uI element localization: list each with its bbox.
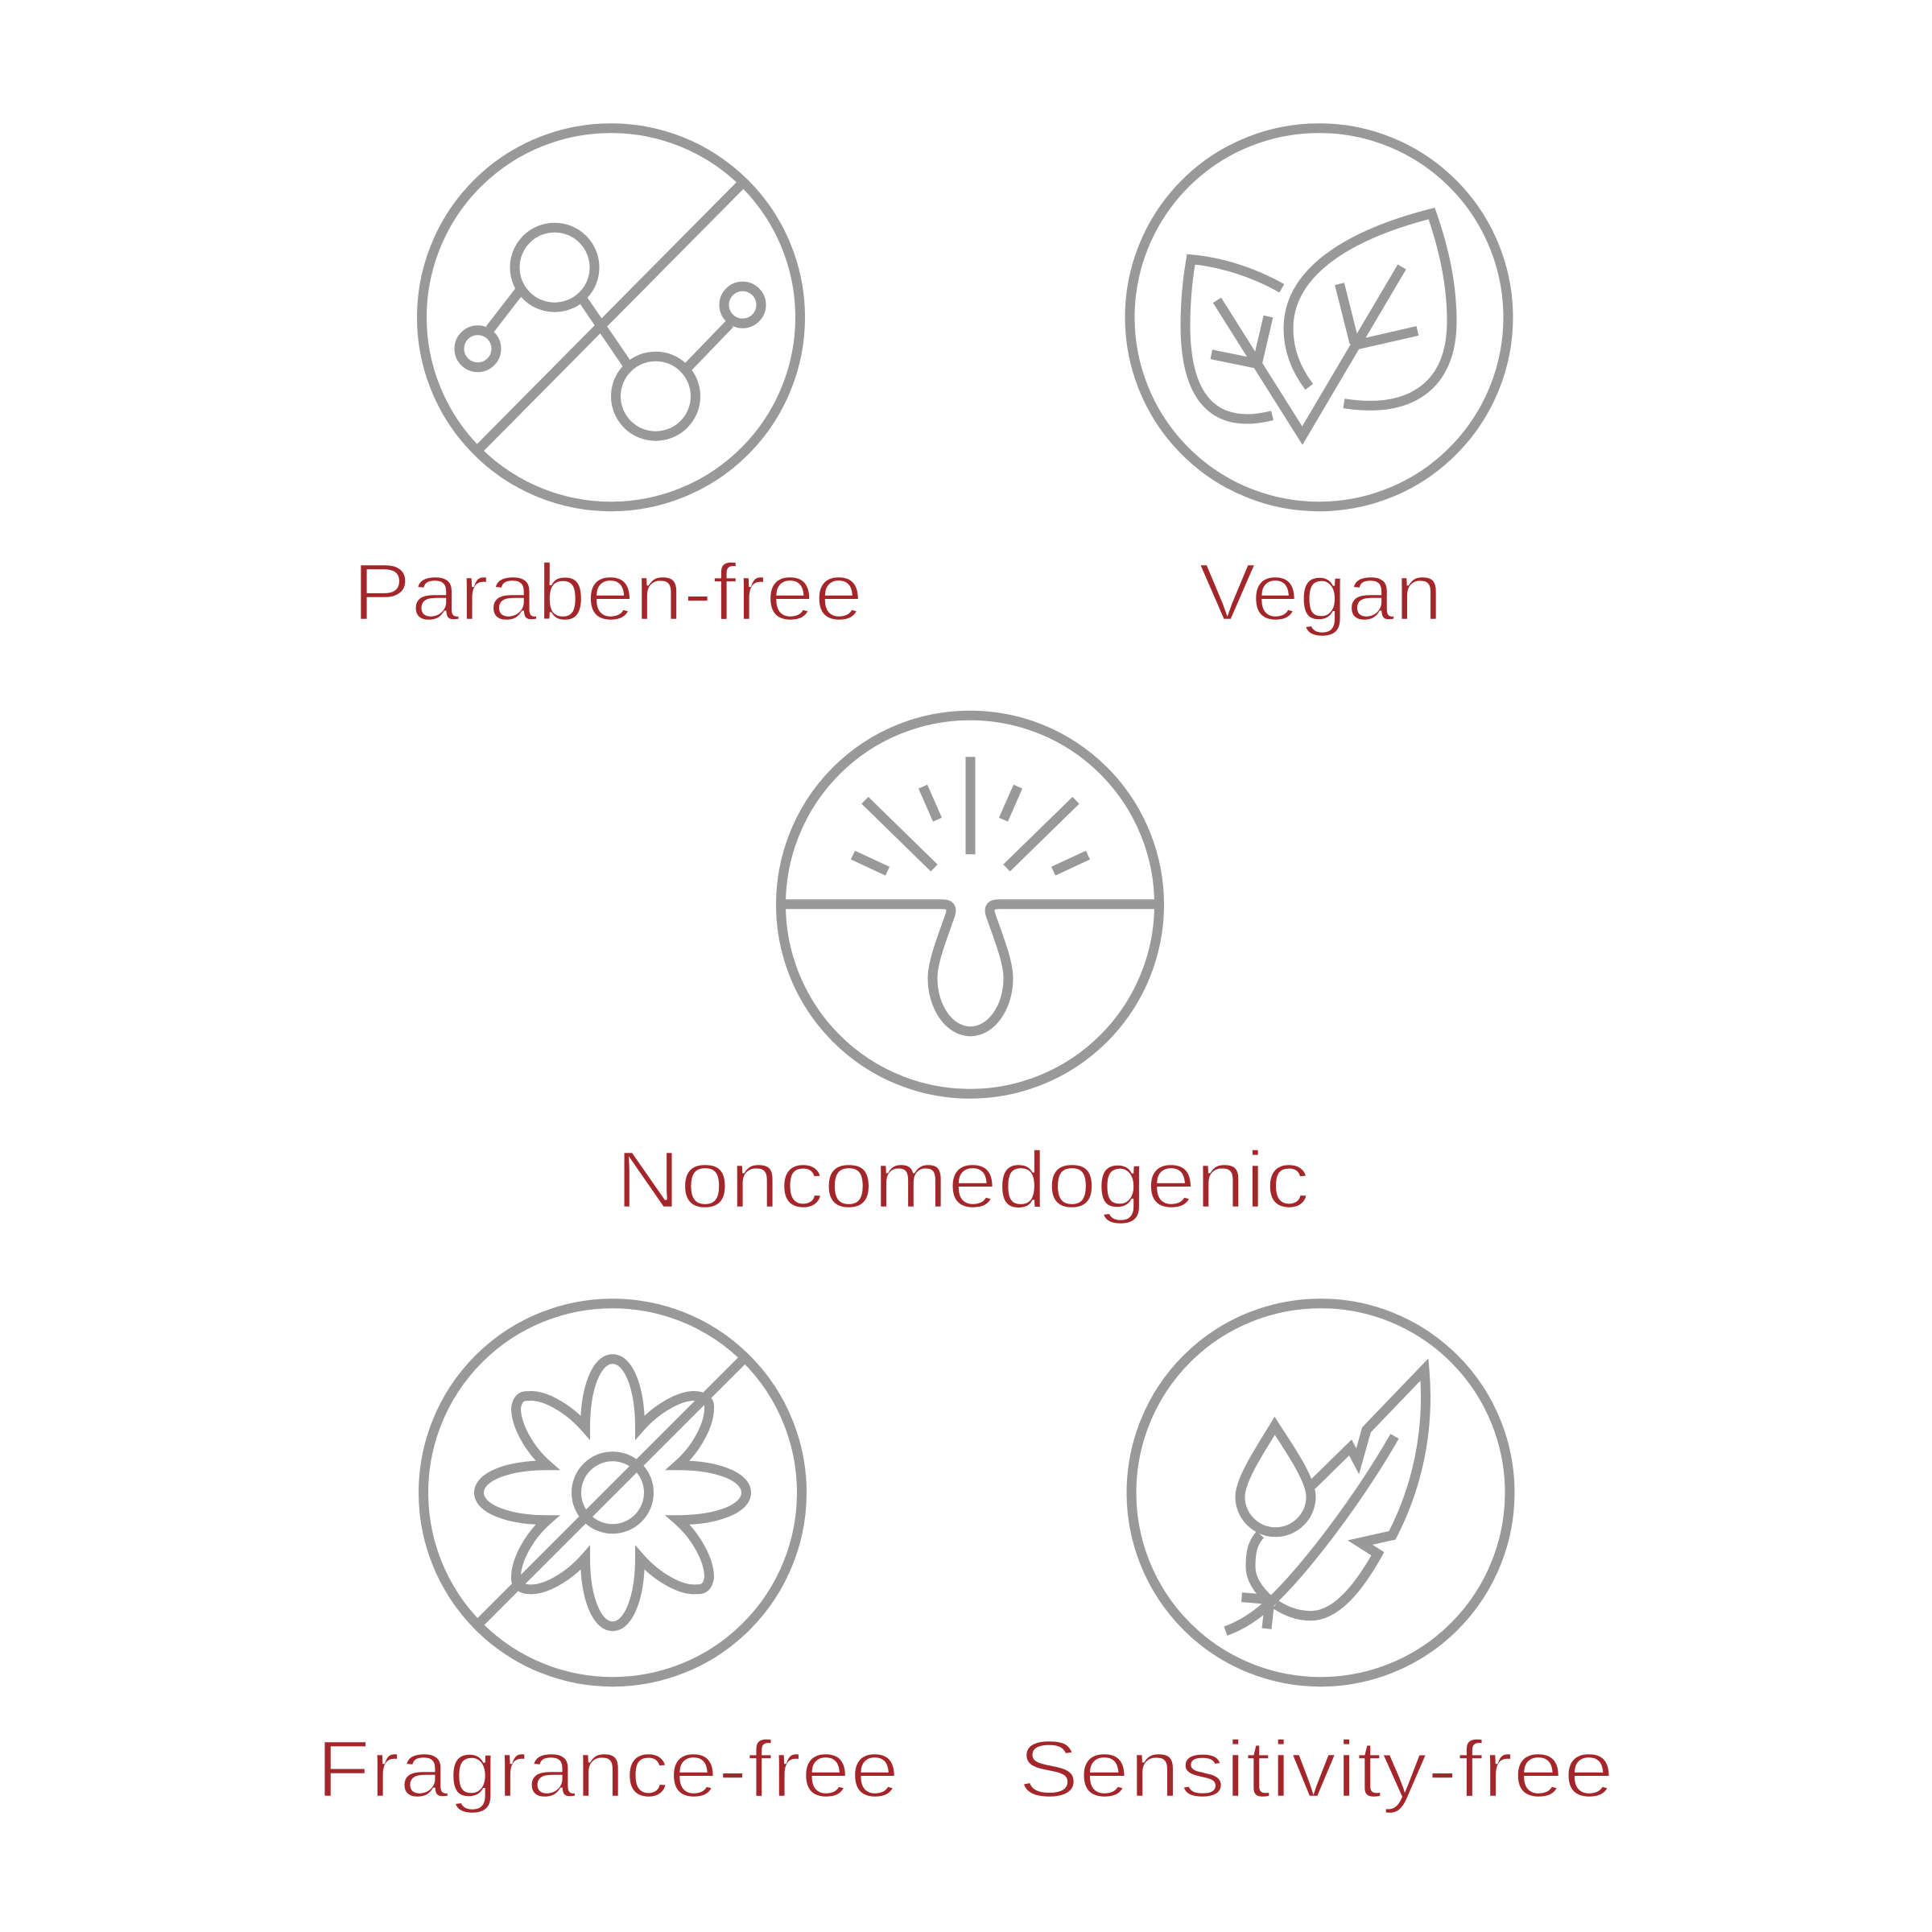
icon: two leaves — [1130, 128, 1509, 506]
panel: fragrance-free — [316, 1303, 899, 1814]
panel: noncomedogenic — [616, 716, 1310, 1225]
icon: drop and feather — [1132, 1303, 1510, 1682]
label: Paraben-free: Paraben-free — [353, 547, 863, 638]
panel: sensitivity-free — [1018, 1303, 1614, 1814]
label: Vegan: Vegan — [1199, 547, 1443, 638]
icon: clear pore with rays — [781, 716, 1159, 1094]
icon: crossed-out molecule — [422, 128, 800, 506]
label: Noncomedogenic: Noncomedogenic — [616, 1135, 1310, 1225]
label: Sensitivity-free: Sensitivity-free — [1018, 1724, 1614, 1814]
icon: crossed-out flower — [423, 1303, 802, 1682]
label: Fragrance-free: Fragrance-free — [316, 1724, 899, 1814]
panel: paraben-free — [353, 128, 863, 638]
panel: vegan — [1130, 128, 1509, 638]
